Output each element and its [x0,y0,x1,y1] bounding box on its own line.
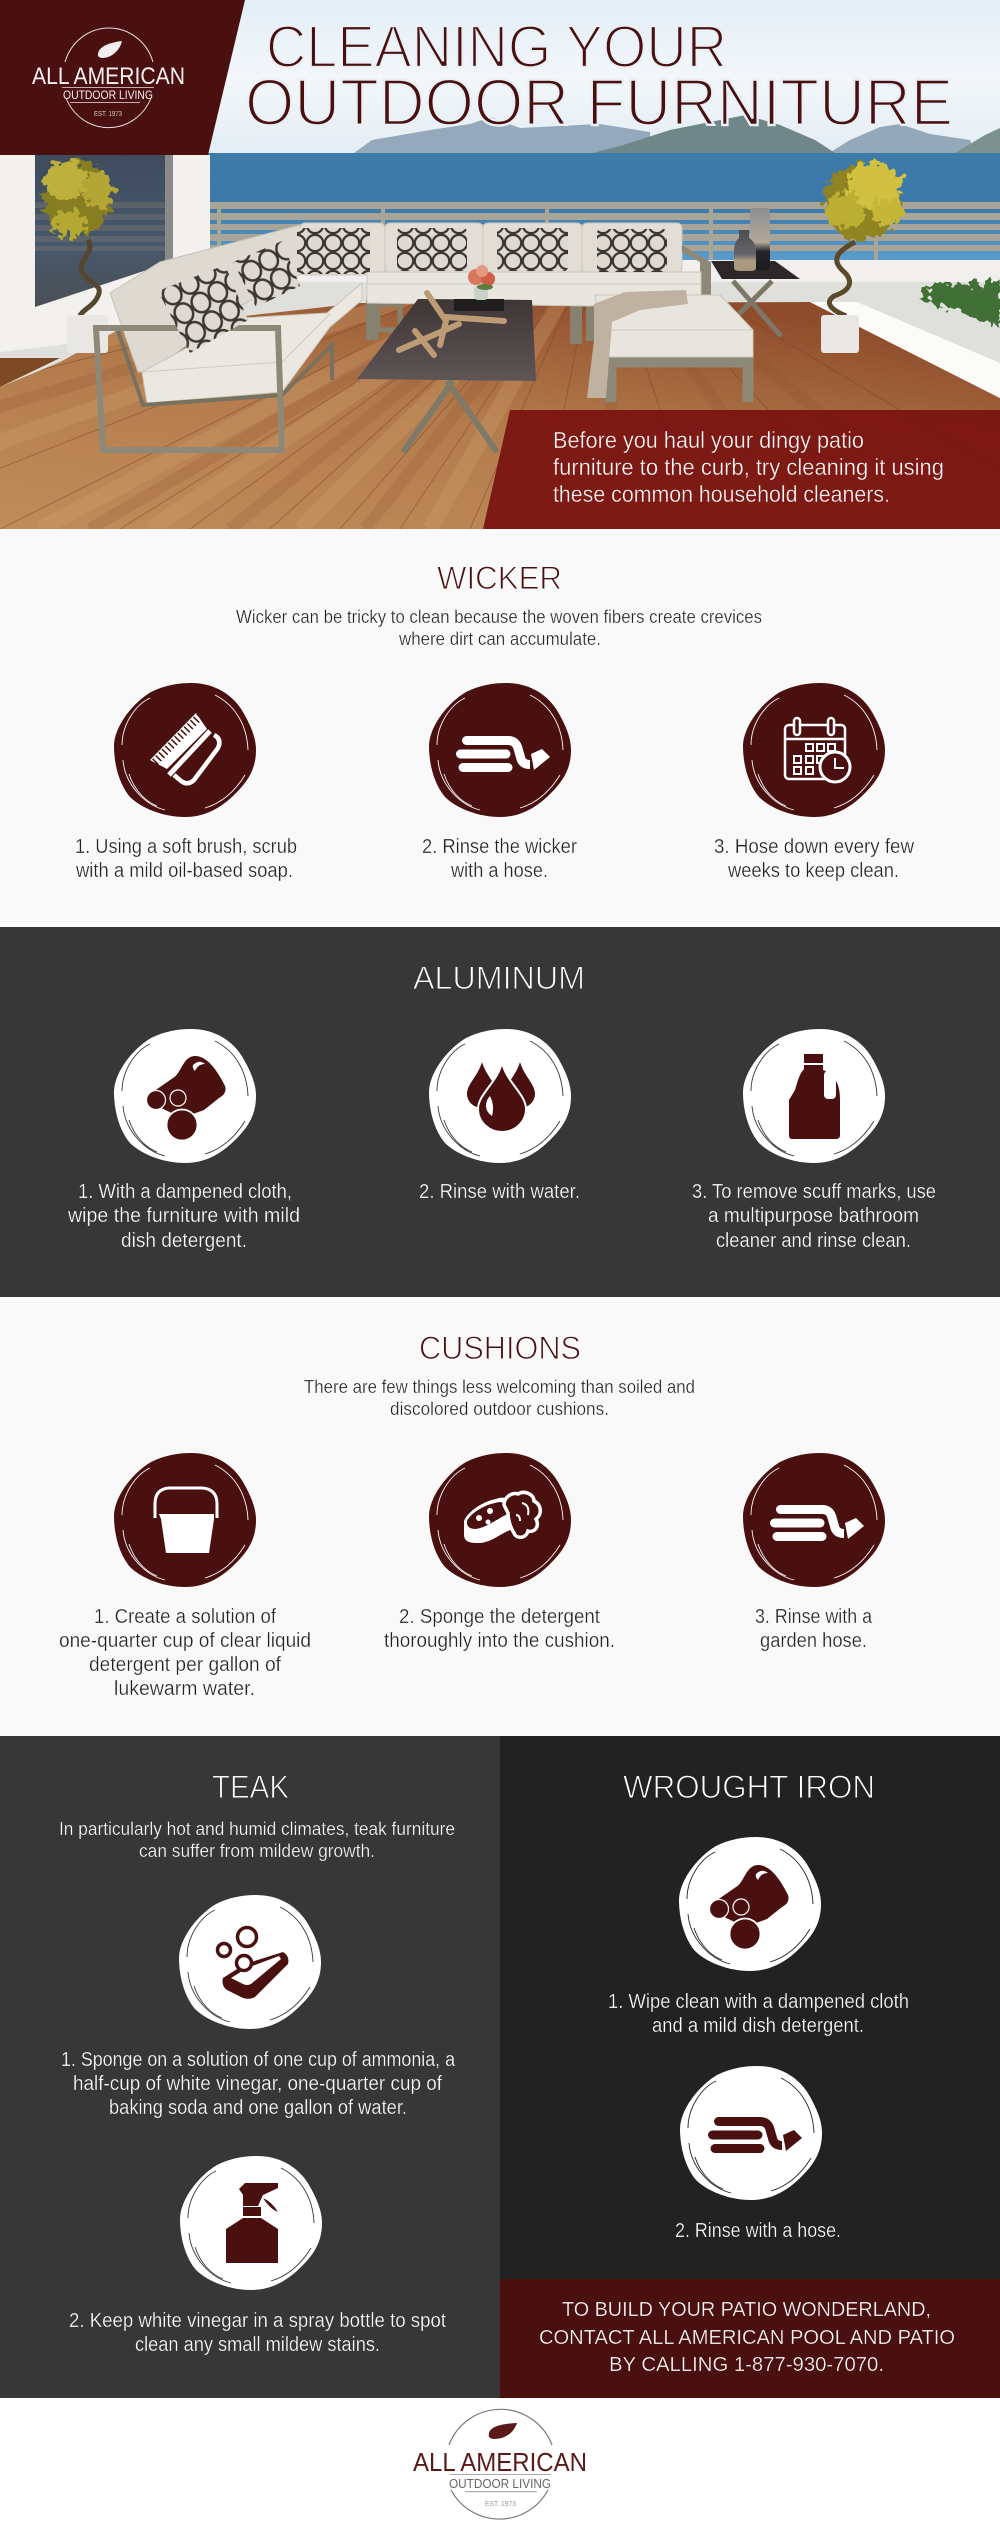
step text: teak 1: half-cup of white vinegar, one-quarter cup of [73,2073,442,2095]
title: CLEANING YOUR [266,14,727,80]
icon: detergent bottle [743,1029,885,1163]
driftwood [399,293,504,355]
sectional sofa [96,223,753,450]
icon: sponge with bubbles [679,1837,821,1971]
back row frame [366,300,595,344]
side table with vases [711,208,800,336]
step text: teak 2 [69,2310,446,2356]
coffee table [357,265,536,452]
icon: hose [429,683,571,817]
emblem circle [449,2409,552,2519]
step text: aluminum 3: cleaner and rinse clean. [716,1230,911,1252]
step text: cushions 1: lukewarm water. [114,1678,255,1700]
intro text [553,427,944,507]
icon: spray bottle [180,2156,322,2290]
cta text: CONTACT ALL AMERICAN POOL AND PATIO [539,2327,955,2349]
step text: cushions 1: one-quarter cup of clear liquid [59,1630,311,1652]
step text: wrought iron 1: and a mild dish detergent. [652,2015,864,2037]
panel: logo [0,0,245,155]
left topiary tree [43,160,114,353]
left back cushions [110,225,305,372]
teak intro: In particularly hot and humid climates, teak furniture [59,1819,455,1839]
icon: calendar and clock [743,683,885,817]
flowers in vase [468,265,495,300]
heading: wicker: WICKER [437,560,562,596]
intro text: these common household cleaners. [553,481,890,507]
logo emblem circle [65,28,153,128]
wicker intro: Wicker can be tricky to clean because the woven fibers create crevices [236,607,762,627]
panel: call to action [500,2279,1000,2398]
icon: hose [680,2066,822,2200]
step text: wicker 1: with a mild oil-based soap. [75,860,293,882]
icon: soap bar with bubbles [179,1895,321,2029]
icon: leaf [489,2423,517,2439]
footer wordmark: OUTDOOR LIVING [449,2476,551,2491]
footer wordmark: EST. 1973 [485,2499,516,2508]
step text: wicker 2: 2. Rinse the wicker [422,836,577,858]
step text: cushions 1: detergent per gallon of [89,1654,281,1676]
step text: wicker 2 [422,836,577,882]
back cushions [300,223,682,275]
patio [0,260,1000,529]
title [245,14,953,139]
step text: wicker 3: weeks to keep clean. [727,860,899,882]
panel: hero photo [0,0,1000,529]
cta text [539,2299,955,2376]
right topiary tree [821,162,904,353]
step text: wicker 2: with a hose. [450,860,548,882]
teak intro: can suffer from mildew growth. [139,1841,375,1861]
step text: aluminum 3 [692,1181,936,1252]
teak intro [59,1819,455,1861]
icon: sponge with bubbles [114,1029,256,1163]
step text: aluminum 3: a multipurpose bathroom [708,1205,919,1227]
step text: teak 1: baking soda and one gallon of water. [109,2097,407,2119]
step text: cushions 3: 3. Rinse with a [755,1606,873,1628]
step text: aluminum 1: 1. With a dampened cloth, [78,1181,292,1203]
step text: teak 2: clean any small mildew stains. [135,2334,380,2356]
step text: wicker 1 [75,836,297,882]
wicker intro: where dirt can accumulate. [398,629,601,649]
icon: hose [743,1453,885,1587]
footer wordmark: ALL AMERICAN [413,2447,587,2477]
icon: bucket [114,1453,256,1587]
panel: footer logo [0,2398,1000,2534]
mountains on the horizon [354,115,1000,153]
intro text: Before you haul your dingy patio [553,427,864,453]
wicker intro [236,607,762,649]
title: OUTDOOR FURNITURE [245,65,953,139]
step text: cushions 2: thoroughly into the cushion. [384,1630,615,1652]
cushions intro: There are few things less welcoming than soiled and [304,1377,695,1397]
step text: teak 1 [61,2049,456,2119]
logo wordmark: EST. 1973 [94,111,122,118]
white wall [0,155,210,352]
left seats [142,283,362,403]
throw-side arm [682,245,711,296]
logo wordmark: ALL AMERICAN [32,63,185,90]
step text: aluminum 1: dish detergent. [121,1230,247,1252]
step text: wrought iron 2: 2. Rinse with a hose. [675,2220,841,2242]
pillows [158,228,667,353]
cushions intro: discolored outdoor cushions. [390,1399,609,1419]
step text: wrought iron 1: 1. Wipe clean with a dampened cloth [608,1991,909,2013]
panel: aluminum [0,927,1000,1297]
heading: wrought iron: WROUGHT IRON [623,1769,875,1805]
cushions intro [304,1377,695,1419]
intro text: furniture to the curb, try cleaning it using [553,454,944,480]
step text: teak 1: 1. Sponge on a solution of one cup of ammonia, a [61,2049,456,2071]
step text: cushions 1: 1. Create a solution of [94,1606,276,1628]
step text: cushions 1 [59,1606,311,1700]
wood deck [0,302,1000,529]
step text: wicker 3 [714,836,915,882]
icon: leaf [98,41,122,58]
step text: cushions 3 [755,1606,873,1652]
step text: aluminum 1: wipe the furniture with mild [67,1205,300,1227]
step text: aluminum 2: 2. Rinse with water. [419,1181,580,1203]
heading: teak: TEAK [212,1769,289,1805]
logo wordmark: OUTDOOR LIVING [63,88,153,102]
left frame [117,328,332,405]
step text: wrought iron 1 [608,1991,909,2037]
white strip beside deck [810,302,1000,398]
icon: sponge with foam [429,1453,571,1587]
panel: intro callout [483,410,1000,529]
step text: wicker 3: 3. Hose down every few [714,836,915,858]
chaise ottoman [587,290,753,402]
back row seats [367,272,701,306]
window [35,155,173,307]
step text: cushions 3: garden hose. [760,1630,867,1652]
icon: water drops [429,1029,571,1163]
footer wordmark [413,2447,587,2508]
cta text: BY CALLING 1-877-930-7070. [609,2354,884,2376]
panel: wicker [0,529,1000,927]
step text: cushions 2: 2. Sponge the detergent [399,1606,600,1628]
heading: aluminum: ALUMINUM [413,960,585,996]
step text: cushions 2 [384,1606,615,1652]
step text: wicker 1: 1. Using a soft brush, scrub [75,836,297,858]
panel: teak [0,1736,500,2398]
panel: cushions [0,1297,1000,1736]
panel: wrought iron [500,1736,1000,2279]
heading: cushions: CUSHIONS [419,1330,581,1366]
icon: brush [114,683,256,817]
logo wordmark [32,63,185,118]
wood step on the left [0,358,60,387]
step text: teak 2: 2. Keep white vinegar in a spray bottle to spot [69,2310,446,2332]
step text: aluminum 1 [67,1181,300,1252]
icon: grass bed [917,282,1000,328]
step text: aluminum 3: 3. To remove scuff marks, use [692,1181,936,1203]
cta text: TO BUILD YOUR PATIO WONDERLAND, [562,2299,931,2321]
railing [204,202,1000,260]
